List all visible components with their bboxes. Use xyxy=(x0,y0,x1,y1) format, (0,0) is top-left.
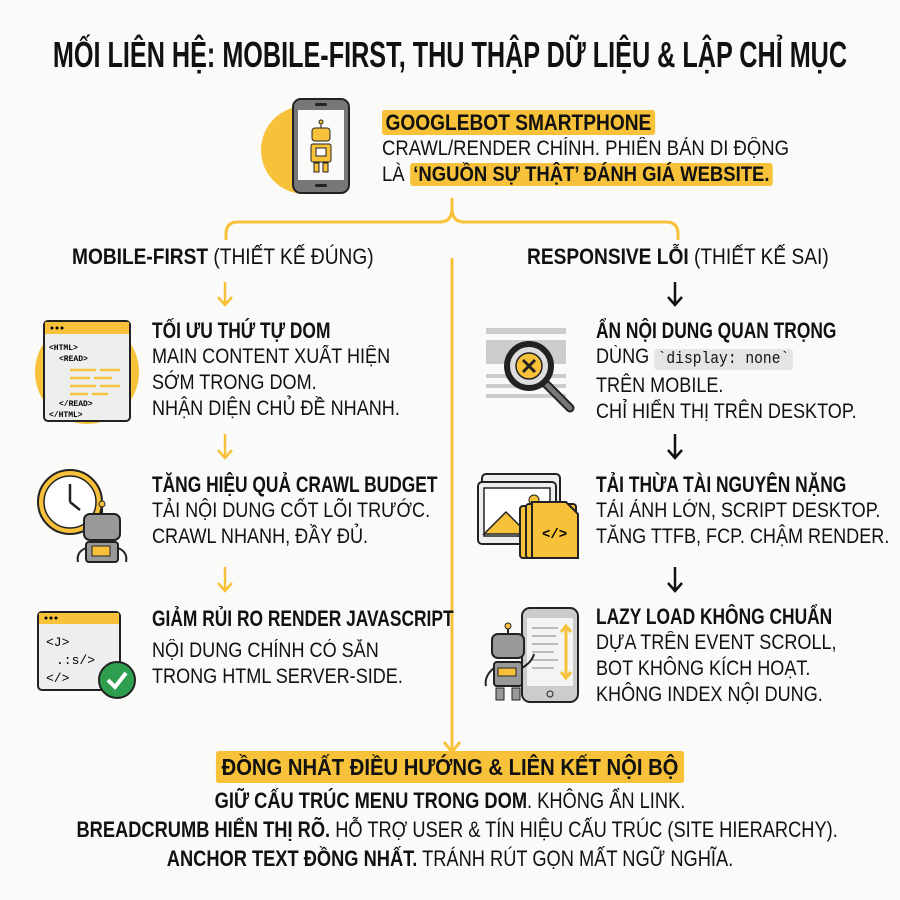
item: ẩn nội dung quan trọng: DÙNG `display: none` xyxy=(596,345,789,369)
item: crawl budget: CRAWL NHANH, ĐẦY ĐỦ. xyxy=(152,525,368,548)
bottom text block: BREADCRUMB HIỂN THỊ RÕ. HỖ TRỢ USER & TÍN HIỆU CẤU TRÚC (SITE HIERARCHY). xyxy=(76,817,838,842)
item: tối ưu thứ tự dom: MAIN CONTENT XUẤT HIỆN xyxy=(152,345,390,368)
heading: responsive lỗi: RESPONSIVE LỖI (THIẾT KẾ SAI) xyxy=(527,244,829,269)
item: ẩn nội dung quan trọng xyxy=(596,318,857,423)
icon: hidden content magnifier xyxy=(486,328,574,412)
icon: html dom: <HTML> xyxy=(49,344,78,353)
item: tải thừa tài nguyên: TẢI ẢNH LỚN, SCRIPT DESKTOP. xyxy=(596,499,880,522)
googlebot text block: LÀ ‘NGUỒN SỰ THẬT’ ĐÁNH GIÁ WEBSITE. xyxy=(382,163,769,186)
item: ẩn nội dung quan trọng: CHỈ HIỂN THỊ TRÊN DESKTOP. xyxy=(596,400,857,423)
item: tối ưu thứ tự dom xyxy=(152,318,400,420)
icon: html dom xyxy=(35,320,139,424)
item: tải thừa tài nguyên xyxy=(596,472,889,548)
icon: html dom: </READ> xyxy=(59,400,93,409)
title: MỐI LIÊN HỆ: MOBILE-FIRST, THU THẬP DỮ LIỆU & LẬP CHỈ MỤC xyxy=(53,34,847,75)
googlebot text block xyxy=(382,110,789,186)
item: tối ưu thứ tự dom: TỐI ƯU THỨ TỰ DOM xyxy=(152,318,330,343)
icon: html dom: </HTML> xyxy=(49,411,83,420)
icon: html dom: <READ> xyxy=(59,355,88,364)
icon: js window check: <J> xyxy=(46,635,70,650)
bottom heading: ĐỒNG NHẤT ĐIỀU HƯỚNG & LIÊN KẾT NỘI BỘ xyxy=(222,754,678,780)
icon: js window check xyxy=(37,611,136,699)
item: crawl budget: TĂNG HIỆU QUẢ CRAWL BUDGET xyxy=(152,472,437,497)
bottom text block: GIỮ CẤU TRÚC MENU TRONG DOM. KHÔNG ẨN LINK. xyxy=(215,788,685,813)
item: giảm rủi ro render js: TRONG HTML SERVER-SIDE. xyxy=(152,665,403,688)
item: tối ưu thứ tự dom: NHẬN DIỆN CHỦ ĐỀ NHANH. xyxy=(152,397,400,420)
item: lazy load không chuẩn: LAZY LOAD KHÔNG CHUẨN xyxy=(596,604,832,629)
item: lazy load không chuẩn xyxy=(596,604,837,706)
item: ẩn nội dung quan trọng: TRÊN MOBILE. xyxy=(596,374,723,397)
item: crawl budget xyxy=(152,472,438,548)
item: ẩn nội dung quan trọng: ẨN NỘI DUNG QUAN TRỌNG xyxy=(596,318,836,343)
icon: heavy resources xyxy=(477,473,579,559)
bottom text block xyxy=(76,788,838,871)
googlebot text block: GOOGLEBOT SMARTPHONE xyxy=(385,110,651,135)
item: lazy load không chuẩn: KHÔNG INDEX NỘI DUNG. xyxy=(596,683,823,706)
item: tải thừa tài nguyên: TĂNG TTFB, FCP. CHẬM RENDER. xyxy=(596,525,889,548)
item: giảm rủi ro render js: GIẢM RỦI RO RENDER JAVASCRIPT xyxy=(152,606,454,631)
heading: mobile-first: MOBILE-FIRST (THIẾT KẾ ĐÚNG) xyxy=(72,244,374,269)
item: tải thừa tài nguyên: TẢI THỪA TÀI NGUYÊN NẶNG xyxy=(596,472,846,497)
icon: heavy resources: </> xyxy=(542,527,567,543)
item: crawl budget: TẢI NỘI DUNG CỐT LÕI TRƯỚC. xyxy=(152,499,430,522)
icon: clock robot xyxy=(37,469,128,563)
icon: googlebot smartphone xyxy=(261,98,350,194)
item: lazy load không chuẩn: BOT KHÔNG KÍCH HOẠT. xyxy=(596,657,810,680)
icon: js window check: </> xyxy=(46,671,70,686)
icon: lazy load robot phone xyxy=(484,607,579,703)
item: giảm rủi ro render js: NỘI DUNG CHÍNH CÓ SẴN xyxy=(152,639,379,662)
item: giảm rủi ro render js xyxy=(152,606,454,688)
bottom text block: ANCHOR TEXT ĐỒNG NHẤT. TRÁNH RÚT GỌN MẤT NGỮ NGHĨA. xyxy=(167,846,733,871)
item: tối ưu thứ tự dom: SỚM TRONG DOM. xyxy=(152,371,317,394)
googlebot text block: CRAWL/RENDER CHÍNH. PHIÊN BẢN DI ĐỘNG xyxy=(382,137,789,160)
item: lazy load không chuẩn: DỰA TRÊN EVENT SCROLL, xyxy=(596,631,837,654)
icon: js window check: .:s/> xyxy=(56,653,95,668)
